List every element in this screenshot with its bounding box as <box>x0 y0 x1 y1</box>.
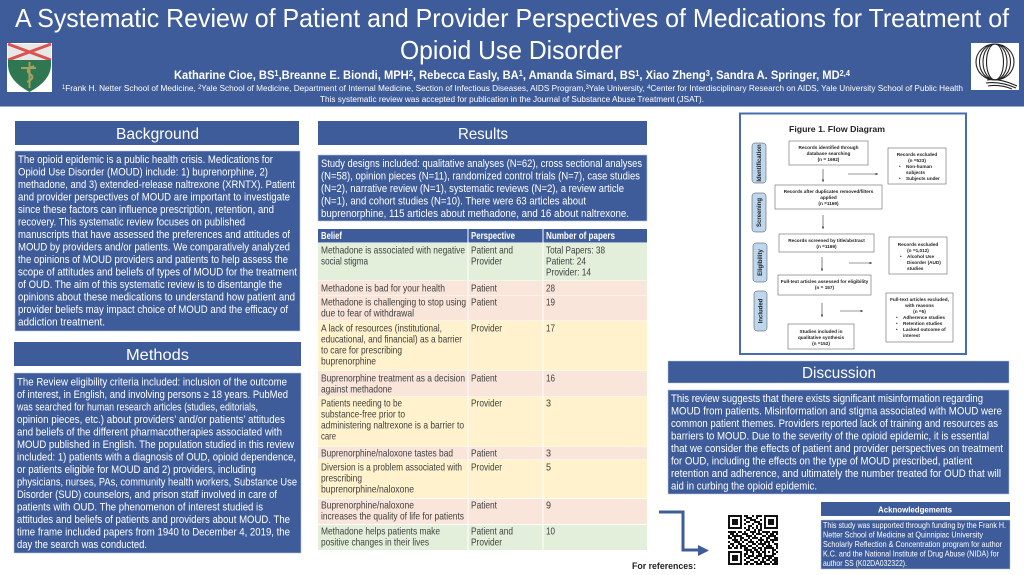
table header row <box>318 229 647 242</box>
row: quality of life: Patient <box>471 500 497 512</box>
text block: methods: and beliefs of the different pharmacotherapies associated with <box>17 426 282 438</box>
affiliations: Frank H. Netter School of Medicine, <box>65 83 198 93</box>
affiliations: 4 <box>647 85 651 91</box>
row: lack of resources: Provider <box>471 324 502 334</box>
title <box>15 3 1010 65</box>
box: records identified: (n = 1692) <box>818 157 840 162</box>
text block: discussion: for OUD, including the effects on the type of MOUD prescribed, patient <box>671 456 972 468</box>
text block: methods <box>14 373 301 553</box>
flow arrows <box>822 169 878 317</box>
authors: ,Breanne E. Biondi, MPH <box>279 68 409 82</box>
text block: discussion: that we consider the effects of patient and provider perspectives on treatment <box>671 443 1003 455</box>
stage label: identification <box>752 143 766 183</box>
text block: background: methadone, and 3) extended-release naltrexone (XRNTX). Patient <box>18 179 295 191</box>
panel: flow diagram <box>740 114 966 354</box>
heading: background: Background <box>116 126 199 143</box>
heading: discussion: Discussion <box>802 365 876 382</box>
box: records excluded 1 <box>888 148 946 184</box>
authors: 1 <box>274 69 279 78</box>
text block: results summary: (N=58), opinion pieces (N=11), randomized control trials (N=7), case studies <box>321 170 640 182</box>
publication note: This systematic review was accepted for publication in the Journal of Substance Abuse Treatment (JSAT). <box>320 94 704 104</box>
box: full-text excluded: • <box>896 327 898 332</box>
title: A Systematic Review of Patient and Provider Perspectives of Medications for Treatment of <box>15 3 1010 33</box>
heading: results: Results <box>458 126 508 143</box>
row: tastes bad: Patient <box>471 448 497 460</box>
box: records excluded 1: Records excluded <box>897 152 937 157</box>
stage label: included <box>754 291 767 331</box>
text block: background: The opioid epidemic is a public health crisis. Medications for <box>18 154 273 166</box>
box: records excluded 2: Disorder (AUD) <box>907 260 941 265</box>
text block: background: addiction treatment. <box>18 316 105 328</box>
text block: background: of OUD. The aim of this systematic review is to disentangle the <box>18 279 282 291</box>
box: studies included: qualitative synthesis <box>798 335 844 340</box>
box: records excluded 2: (n =1,012) <box>907 248 929 253</box>
row: substance-free barrier: 3 <box>546 398 551 410</box>
title: Opioid Use Disorder <box>400 35 622 65</box>
row: fear of withdrawal: Patient <box>471 298 497 308</box>
text block: results summary: (N=1), and cohort studies (N=10). There were 63 articles about <box>321 196 586 208</box>
QR code <box>728 516 778 564</box>
box: full-text assessed: Full-text articles assessed for eligibility <box>781 279 869 284</box>
box: records identified: Records identified through <box>799 145 859 150</box>
text block: methods: of interest, in English, and involving persons ≥ 18 years. PubMed <box>17 389 288 401</box>
row: negative social stigma: social stigma <box>321 256 368 268</box>
box: full-text excluded: with reasons <box>904 303 934 308</box>
row: bad for your health: 28 <box>546 284 555 294</box>
heading: methods <box>14 342 301 366</box>
text block: background: scope of attitudes and beliefs of types of MOUD for the treatment <box>18 266 297 278</box>
text block: methods: opinion pieces, etc.) about providers’ and/or patients’ attitudes <box>17 414 285 426</box>
box: full-text excluded: Lacked outcome of <box>903 327 946 332</box>
row: diversion: 5 <box>546 462 551 474</box>
row: substance-free barrier: care <box>321 432 336 442</box>
row: substance-free barrier: Patients needing to be <box>321 398 402 410</box>
label: for references: For references: <box>632 560 696 571</box>
text block: acknowledgements <box>821 520 1010 569</box>
box: records excluded 1: Subjects under <box>906 176 940 181</box>
row: negative social stigma <box>318 243 647 280</box>
row: tastes bad: 3 <box>546 448 551 460</box>
authors: , Rebecca Easly, BA <box>413 68 519 82</box>
box: full-text excluded: (n =5) <box>913 309 926 314</box>
row: diversion: prescribing <box>321 474 362 484</box>
row: decision against methadone: Patient <box>471 374 497 384</box>
text block: methods: Disorder (SUD) counselors, and prison staff involved in care of <box>17 489 277 501</box>
box: full-text excluded: interest <box>903 333 920 338</box>
authors: , Amanda Simard, BS <box>523 68 635 82</box>
row: decision against methadone: Buprenorphine treatment as a decision <box>321 374 465 384</box>
box: full-text assessed <box>778 275 871 295</box>
box: records excluded 1: • <box>899 176 901 181</box>
text block: acknowledgements: K.C. and the National Institute of Drug Abuse (NIDA) for <box>823 550 999 558</box>
box: records screened <box>779 234 874 252</box>
row: diversion <box>318 460 647 498</box>
stage label: included: Included <box>759 298 765 323</box>
row: lack of resources: buprenorphine <box>321 356 376 368</box>
affiliations: 2 <box>198 85 202 91</box>
text block: discussion: retention and adherence, and ultimately the number treated for OUD that will <box>671 468 1001 480</box>
heading: results <box>318 121 647 145</box>
row: quality of life: increases the quality of life for patients <box>321 512 464 522</box>
row: bad for your health: Patient <box>471 284 497 294</box>
text block: results summary: Study designs included: qualitative analyses (N=62), cross sectional analyses <box>321 158 642 170</box>
box: records screened: Records screened by title/abstract <box>788 238 865 243</box>
row: negative social stigma: Total Papers: 38 <box>546 246 605 256</box>
panel: discussion <box>668 361 1009 494</box>
row: diversion: Diversion is a problem associated with <box>321 462 462 474</box>
authors: , Sandra A. Springer, MD <box>710 68 840 82</box>
row: negative social stigma: Patient: 24 <box>546 256 586 268</box>
row: substance-free barrier: administering naltrexone is a barrier to <box>321 420 464 432</box>
row: quality of life: Buprenorphine/naloxone <box>321 500 414 512</box>
text block: background: since these factors can influence prescription, retention, and <box>18 204 274 216</box>
text block: background: opinions about these medications to understand how patient and <box>18 292 295 304</box>
panel: results <box>318 121 647 550</box>
box: records excluded 2: studies <box>907 266 924 271</box>
authors: 1 <box>519 69 523 78</box>
text block: results summary <box>318 155 647 221</box>
row: fear of withdrawal: due to fear of withdrawal <box>321 308 414 320</box>
box: studies included <box>788 324 854 349</box>
panel: acknowledgements <box>821 502 1010 569</box>
row: substance-free barrier <box>318 397 647 446</box>
affiliations: Yale School of Medicine, Department of Internal Medicine, Section of Infectious Diseases, AIDS Program, <box>201 83 586 93</box>
heading: discussion <box>668 361 1009 383</box>
box: full-text excluded: • <box>896 315 898 320</box>
heading: acknowledgements: Acknowledgements <box>878 504 952 514</box>
row: lack of resources <box>318 321 647 370</box>
box: after duplicates removed: (n =1169) <box>818 201 839 206</box>
row: bad for your health <box>318 281 647 296</box>
text block: methods: MOUD published in English. The population studied in this review <box>17 439 294 451</box>
box: records excluded 2: Records excluded <box>898 242 938 247</box>
text block: discussion: common patient themes. Providers reported lack of training and resources as <box>671 418 998 430</box>
text block: background <box>15 151 300 331</box>
text block: discussion: MOUD from patients. Misinformation and stigma associated with MOUD were <box>671 406 1002 418</box>
box: after duplicates removed <box>775 185 882 209</box>
heading: acknowledgements <box>821 502 1010 516</box>
box: full-text excluded <box>886 293 953 342</box>
text block: background: and provider perspectives of MOUD are important to investigate <box>18 192 290 204</box>
text block: background: Opioid Use Disorder (MOUD) include: 1) buprenorphine, 2) <box>18 166 268 178</box>
text block: methods: The Review eligibility criteria included: inclusion of the outcome <box>17 376 287 388</box>
row: decision against methadone: 16 <box>546 374 555 384</box>
box: studies included: Studies included in <box>800 329 843 334</box>
box: records excluded 2: • <box>900 254 902 259</box>
table header row: Belief <box>321 231 342 242</box>
panel: methods <box>14 342 301 553</box>
stage label: screening <box>752 193 766 232</box>
row: positive changes: Methadone helps patients make <box>321 526 440 538</box>
authors: 1 <box>635 69 640 78</box>
text block: discussion: aid in curbing the opioid epidemic. <box>671 480 817 492</box>
box: after duplicates removed: applied <box>820 195 837 200</box>
heading: methods: Methods <box>126 347 189 364</box>
text block: results summary: (N=2), narrative review (N=1), systematic reviews (N=2), a review article <box>321 183 624 195</box>
box: studies included: (n =152) <box>812 341 830 346</box>
box: records screened: (n =1169) <box>816 244 837 249</box>
box: after duplicates removed: Records after duplicates removed/filters <box>784 189 874 194</box>
text block: methods: time frame included papers from 1940 to December 4, 2019, the <box>17 526 290 538</box>
box: records excluded 1: subjects <box>906 170 925 175</box>
box: records excluded 2: Alcohol Use <box>907 254 934 259</box>
text block: methods: attitudes and beliefs of patients and providers about MOUD. The <box>17 514 290 526</box>
stage label: eligibility <box>753 243 767 282</box>
text block: background: MOUD by providers and/or patients. We comparatively analyzed <box>18 242 290 254</box>
box: full-text excluded: • <box>896 321 898 326</box>
authors: Katharine Cioe, BS <box>174 68 282 82</box>
affiliations: 1 <box>62 85 66 91</box>
text block: methods: included: 1) patients with a diagnosis of OUD, opioid dependence, <box>17 452 296 464</box>
row: lack of resources: educational, and financial) as a barrier <box>321 334 462 346</box>
text block: background: manuscripts that have assessed the preferences and attitudes of <box>18 229 290 241</box>
affiliations: Yale University, <box>589 83 647 93</box>
box: records excluded 1: (n =523) <box>908 158 926 163</box>
text block: results summary: buprenorphine, 115 articles about methadone, and 16 about naltrexone. <box>321 208 629 220</box>
box: records excluded 1: • <box>899 164 901 169</box>
flow diagram title: Figure 1. Flow Diagram <box>789 124 885 134</box>
text block: discussion <box>668 390 1009 494</box>
row: lack of resources: A lack of resources (institutional, <box>321 324 442 334</box>
row: lack of resources: 17 <box>546 324 555 334</box>
text block: methods: physicians, nurses, PAs, community health workers, Substance Use <box>17 476 297 488</box>
table: beliefs by perspective <box>318 229 647 550</box>
row: diversion: Provider <box>471 462 502 474</box>
row: fear of withdrawal: Methadone is challenging to stop using <box>321 298 466 308</box>
row: positive changes <box>318 525 647 550</box>
text block: methods: day the search was conducted. <box>17 539 147 551</box>
row: positive changes: positive changes in their lives <box>321 538 429 548</box>
row: substance-free barrier: Provider <box>471 398 502 410</box>
text block: discussion: This review suggests that there exists significant misinformation regarding <box>671 393 983 405</box>
text block: methods: or patients eligible for MOUD and 2) providers, including <box>17 464 256 476</box>
box: full-text excluded: Retention studies <box>903 321 943 326</box>
text block: discussion: barriers to MOUD. Due to the severity of the opioid epidemic, it is essential <box>671 430 989 442</box>
authors: 3 <box>706 69 710 78</box>
row: tastes bad: Buprenorphine/naloxone tastes bad <box>321 448 453 460</box>
authors: , Xiao Zheng <box>639 68 706 82</box>
row: negative social stigma: Provider: 14 <box>546 268 591 278</box>
row: decision against methadone <box>318 371 647 396</box>
text block: methods: patients with OUD. The phenomenon of interest studied is <box>17 502 263 514</box>
heading: background <box>15 121 299 145</box>
row: negative social stigma: Patient and <box>471 246 513 256</box>
affiliations: 3 <box>586 85 589 91</box>
row: tastes bad <box>318 447 647 460</box>
box: records excluded 1: Non-human <box>906 164 932 169</box>
stage label: eligibility: Eligibility <box>758 249 764 276</box>
panel: background <box>15 121 300 331</box>
box: records identified: database searching <box>807 151 851 156</box>
row: diversion: buprenorphine/naloxone <box>321 484 414 496</box>
row: positive changes: Provider <box>471 538 502 548</box>
stage label: identification: Identification <box>757 144 763 182</box>
box: full-text excluded: Adherence studies <box>903 315 945 320</box>
row: fear of withdrawal <box>318 296 647 320</box>
text block: acknowledgements: Netter School of Medicine at Quinnipiac University <box>823 530 984 540</box>
icon: Q logo <box>971 43 1019 90</box>
affiliations: Center for Interdisciplinary Research on AIDS, Yale University School of Public Health <box>650 83 963 93</box>
row: substance-free barrier: substance-free prior to <box>321 410 405 420</box>
box: full-text assessed: (n = 157) <box>815 285 835 290</box>
row: fear of withdrawal: 19 <box>546 298 555 308</box>
authors: 2 <box>409 69 413 78</box>
box: full-text excluded: Full-text articles excluded, <box>890 297 949 302</box>
text block: acknowledgements: author SS (K02DA032322). <box>823 559 907 568</box>
table header row: Perspective <box>471 231 515 242</box>
row: quality of life: 9 <box>546 500 551 512</box>
row: positive changes: Patient and <box>471 526 513 538</box>
row: negative social stigma: Methadone is associated with negative <box>321 246 465 256</box>
row: quality of life <box>318 499 647 524</box>
stage label: screening: Screening <box>757 198 763 227</box>
icon: school of medicine shield <box>7 43 52 92</box>
table header row: Number of papers <box>546 231 615 242</box>
row: lack of resources: to care for prescribing <box>321 346 402 356</box>
text block: acknowledgements: Scholarly Reflection & Concentration program for author <box>823 540 1002 549</box>
text block: background: the opinions of MOUD providers and patients to help assess the <box>18 254 288 266</box>
row: positive changes: 10 <box>546 526 555 538</box>
text block: background: recovery. This systematic review focuses on published <box>18 216 245 228</box>
text block: background: provider beliefs may impact choice of MOUD and the efficacy of <box>18 304 288 316</box>
row: bad for your health: Methadone is bad for your health <box>321 284 445 294</box>
authors: 2,4 <box>840 69 851 78</box>
box: records excluded 2 <box>889 237 947 274</box>
header band <box>0 0 1024 107</box>
arrow: to QR code <box>659 512 709 556</box>
row: decision against methadone: against methadone <box>321 384 392 396</box>
row: negative social stigma: Provider <box>471 256 502 268</box>
box: records identified <box>789 141 868 165</box>
text block: methods: was searched for human research articles (studies, editorials, <box>16 402 258 414</box>
